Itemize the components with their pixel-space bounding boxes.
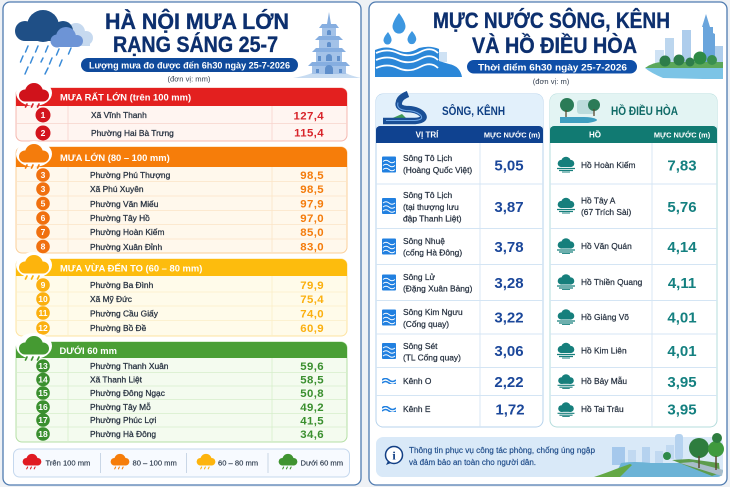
section: very heavy rain: 1 — [41, 110, 46, 120]
panel: water levels — [369, 2, 727, 485]
icon: info bubble — [386, 446, 402, 465]
section: under 60 mm: 41,5 — [300, 416, 324, 428]
section: heavy rain: 5 — [41, 198, 46, 208]
table: rivers and canals: (TL Cống quay) — [403, 352, 461, 362]
icon: winding river — [383, 94, 423, 121]
section: moderate to heavy rain: Phường Ba Đình — [90, 280, 154, 290]
subtitle pill: Thời điểm 6h30 ngày 25-7-2026 — [478, 62, 627, 72]
section: under 60 mm: Phường Tây Mỗ — [90, 402, 151, 412]
section: under 60 mm: 16 — [38, 402, 48, 412]
table: rivers and canals: 1,72 — [495, 402, 525, 418]
title: VÀ HỒ ĐIỀU HÒA — [472, 33, 637, 58]
section: under 60 mm — [16, 333, 347, 442]
info note — [376, 433, 724, 477]
table: regulating lakes: Hồ Bảy Mẫu — [581, 376, 627, 386]
table: rivers and canals: Sông Sét — [403, 341, 438, 351]
legend item: under 60: Dưới 60 mm — [300, 458, 343, 468]
section: heavy rain: Phường Hoàn Kiếm — [90, 227, 164, 237]
unit note: (đơn vị: m) — [533, 77, 570, 86]
section: moderate to heavy rain: Phường Cầu Giấy — [90, 308, 159, 318]
table: rivers and canals: Kênh E — [403, 404, 431, 414]
table: rivers and canals: 2,22 — [494, 374, 524, 391]
legend — [14, 449, 350, 477]
section: under 60 mm: Phường Hà Đông — [90, 429, 156, 439]
section: heavy rain: 98,5 — [300, 170, 324, 182]
section: under 60 mm: DƯỚI 60 mm — [60, 345, 117, 356]
table: rivers and canals: đập Thanh Liệt) — [403, 214, 462, 224]
table: regulating lakes: 3,95 — [667, 402, 697, 418]
section: heavy rain: Phường Tây Hồ — [90, 213, 150, 223]
icon: yellow cloud — [16, 252, 52, 279]
section: heavy rain: 6 — [41, 213, 46, 223]
section: moderate to heavy rain: 60,9 — [300, 323, 324, 335]
table: rivers and canals: (cống Hà Đông) — [403, 248, 462, 258]
section: moderate to heavy rain: Phường Bồ Đề — [90, 323, 147, 333]
section: moderate to heavy rain: 12 — [38, 323, 48, 333]
section: very heavy rain: Xã Vĩnh Thanh — [91, 110, 147, 120]
section: under 60 mm: 13 — [38, 361, 48, 371]
section: moderate to heavy rain: 10 — [38, 294, 48, 304]
section: heavy rain: Phường Xuân Đỉnh — [90, 242, 162, 252]
section: under 60 mm: Phường Đông Ngạc — [90, 388, 165, 398]
heading: SÔNG, KÊNH — [442, 105, 505, 118]
table: rivers and canals: 3,22 — [494, 310, 524, 326]
title — [105, 9, 289, 57]
section: heavy rain: Phường Văn Miếu — [90, 199, 159, 209]
section: very heavy rain: 115,4 — [294, 128, 324, 140]
table: regulating lakes: (67 Trích Sài) — [581, 207, 631, 217]
section: very heavy rain: Phường Hai Bà Trưng — [91, 128, 174, 138]
title — [433, 8, 670, 58]
section: moderate to heavy rain: 79,9 — [300, 280, 324, 292]
section: heavy rain: Phường Phú Thượng — [90, 170, 171, 180]
unit note: (đơn vị: mm) — [168, 74, 211, 84]
table: regulating lakes: Hồ Thiền Quang — [581, 277, 643, 287]
table: regulating lakes: 7,83 — [667, 158, 697, 174]
table: rivers and canals: Kênh O — [403, 376, 432, 386]
section: under 60 mm: 17 — [38, 415, 48, 425]
info note: Thông tin phục vụ công tác phòng, chống úng ngập — [409, 446, 596, 455]
legend item: 80-100: 80 – 100 mm — [132, 458, 177, 468]
table: regulating lakes: HỒ — [589, 130, 601, 140]
icon: info bubble: i — [392, 448, 396, 462]
section: under 60 mm: 50,8 — [300, 388, 324, 400]
section: moderate to heavy rain: 74,0 — [300, 308, 324, 320]
subtitle pill: Lượng mưa đo được đến 6h30 ngày 25-7-2026 — [89, 60, 290, 70]
section: under 60 mm: 15 — [38, 388, 48, 398]
section: moderate to heavy rain — [16, 252, 347, 336]
icon: orange cloud — [16, 141, 52, 168]
info note: và đảm bảo an toàn cho người dân. — [409, 458, 536, 467]
section: under 60 mm: 49,2 — [300, 402, 324, 414]
section: heavy rain: 3 — [41, 170, 46, 180]
table: regulating lakes: Hồ Văn Quán — [581, 241, 632, 251]
table: rivers and canals: Sông Tô Lịch — [403, 190, 453, 200]
table: regulating lakes: 3,95 — [667, 374, 697, 391]
table: rivers and canals: 3,78 — [494, 239, 524, 256]
icon: rain clouds — [15, 10, 93, 74]
section: heavy rain: 7 — [41, 227, 46, 237]
section: heavy rain: 85,0 — [300, 227, 324, 239]
table: rivers and canals: Sông Tô Lịch — [403, 153, 453, 163]
section: under 60 mm: Phường Phúc Lợi — [90, 415, 157, 425]
section: moderate to heavy rain: Xã Mỹ Đức — [90, 294, 132, 304]
table: regulating lakes: 4,11 — [668, 275, 696, 292]
section: under 60 mm: 34,6 — [300, 429, 324, 441]
table: rivers and canals: (Cống quay) — [403, 319, 449, 329]
section: under 60 mm: 59,6 — [300, 361, 324, 373]
legend item: over 100: Trên 100 mm — [46, 458, 90, 468]
table: regulating lakes: 4,01 — [667, 343, 697, 360]
table: rivers and canals: (tại thượng lưu — [403, 202, 459, 212]
section: under 60 mm: Xã Thanh Liệt — [90, 374, 143, 384]
section: heavy rain: 8 — [41, 242, 46, 252]
section: heavy rain: 98,5 — [300, 184, 324, 196]
table: regulating lakes: 5,76 — [667, 199, 697, 216]
legend item: under 60 — [279, 454, 343, 469]
section: very heavy rain: 2 — [41, 128, 46, 138]
table: regulating lakes: Hồ Tai Trâu — [581, 404, 624, 414]
section: moderate to heavy rain: 9 — [41, 280, 46, 290]
section: heavy rain: MƯA LỚN (80 – 100 mm) — [60, 152, 170, 163]
table: regulating lakes: Hồ Tây A — [581, 196, 616, 206]
section: under 60 mm: Phường Thanh Xuân — [90, 361, 169, 371]
section: moderate to heavy rain: 75,4 — [300, 294, 324, 306]
table: rivers and canals: VỊ TRÍ — [416, 130, 439, 140]
table: regulating lakes: MỰC NƯỚC (m) — [654, 130, 711, 140]
legend item: over 100 — [23, 454, 90, 469]
section: heavy rain: Xã Phú Xuyên — [90, 184, 144, 194]
table: regulating lakes: Hồ Hoàn Kiếm — [581, 160, 635, 170]
table: regulating lakes: 4,01 — [667, 310, 697, 326]
table: rivers and canals: MỰC NƯỚC (m) — [484, 130, 541, 140]
icon: pagoda — [293, 12, 361, 78]
section: very heavy rain — [16, 80, 347, 141]
icon: green cloud — [16, 333, 52, 360]
heading: HỒ ĐIỀU HÒA — [611, 105, 678, 118]
section: heavy rain — [16, 141, 347, 254]
section: heavy rain: 3 — [41, 184, 46, 194]
section: moderate to heavy rain: MƯA VỪA ĐẾN TO (60 – 80 mm) — [60, 262, 202, 274]
legend item: 60-80: 60 – 80 mm — [218, 458, 258, 468]
icon: trees and lake — [560, 98, 600, 123]
icon: red cloud — [16, 80, 52, 107]
table: regulating lakes: 4,14 — [667, 239, 697, 256]
table: rivers and canals: 3,06 — [494, 343, 524, 360]
legend item: 60-80 — [197, 454, 258, 469]
table: rivers and canals — [376, 94, 543, 427]
table: regulating lakes — [550, 94, 717, 427]
illustration: city river scene — [594, 433, 724, 477]
table: rivers and canals: Sông Kim Ngưu — [403, 307, 463, 317]
section: very heavy rain: MƯA RẤT LỚN (trên 100 mm) — [60, 92, 191, 102]
table: rivers and canals: 3,87 — [494, 199, 524, 216]
section: moderate to heavy rain: 11 — [38, 308, 48, 318]
table: rivers and canals: Sông Nhuệ — [403, 236, 445, 246]
section: under 60 mm: 14 — [38, 374, 48, 384]
table: regulating lakes: Hồ Giảng Võ — [581, 312, 629, 322]
table: rivers and canals: 5,05 — [494, 158, 524, 174]
title: MỰC NƯỚC SÔNG, KÊNH — [433, 8, 670, 33]
section: heavy rain: 97,9 — [300, 198, 324, 210]
section: heavy rain: 97,0 — [300, 213, 324, 225]
icon: city and lake — [645, 14, 723, 79]
title: RẠNG SÁNG 25-7 — [113, 32, 278, 57]
section: under 60 mm: 58,5 — [300, 374, 324, 386]
section: heavy rain: 83,0 — [300, 242, 324, 254]
table: rivers and canals: (Đặng Xuân Bảng) — [403, 284, 473, 294]
section: very heavy rain: 127,4 — [293, 110, 324, 122]
panel: rainfall — [3, 2, 361, 485]
section: under 60 mm: 18 — [38, 429, 48, 439]
table: rivers and canals: (Hoàng Quốc Việt) — [403, 165, 472, 175]
table: rivers and canals: Sông Lử — [403, 272, 436, 282]
icon: drops and waves — [375, 13, 462, 77]
legend item: 80-100 — [111, 454, 177, 469]
table: regulating lakes: Hồ Kim Liên — [581, 346, 627, 356]
title: HÀ NỘI MƯA LỚN — [105, 9, 289, 34]
subtitle pill — [467, 60, 637, 74]
table: rivers and canals: 3,28 — [494, 275, 524, 292]
